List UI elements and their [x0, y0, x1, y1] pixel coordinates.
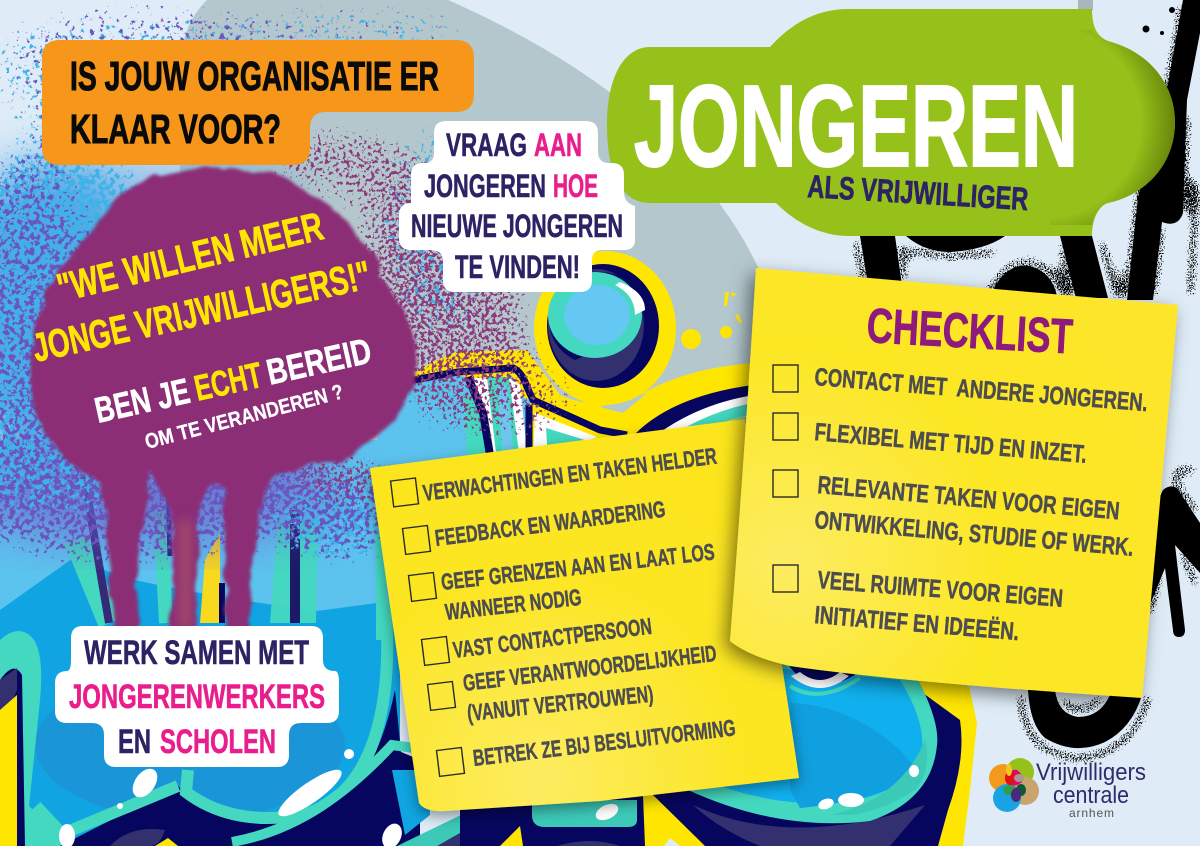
green title banner — [607, 0, 1175, 236]
graffiti ring — [534, 251, 742, 405]
list items: GEEF VERANTWOORDELIJKHEID — [462, 640, 718, 696]
right bubble — [650, 660, 977, 846]
spray speckle, black — [855, 0, 1200, 758]
centre graffiti: colour fills — [375, 375, 530, 475]
subtitle: ALS VRIJWILLIGER — [807, 168, 1029, 217]
list items: GEEF GRENZEN AAN EN LAAT LOS — [440, 538, 716, 595]
question text: ECHT — [190, 354, 266, 409]
bottom centre navy — [460, 795, 730, 846]
black graffiti letters, right — [855, 0, 1200, 758]
heading: orange bubble: KLAAR VOOR? — [70, 106, 281, 152]
checklist heading: CHECKLIST — [865, 299, 1074, 364]
graffiti artwork, centre and bottom — [0, 350, 977, 846]
left hump — [0, 631, 70, 846]
bubble text: AAN — [534, 127, 582, 163]
bubble text — [69, 634, 325, 761]
white highlights — [128, 764, 162, 802]
checkboxes — [773, 365, 798, 592]
logo icon — [989, 758, 1039, 812]
bubble text: JONGEREN — [424, 168, 546, 204]
bubble text: WERK SAMEN MET — [84, 634, 309, 672]
speckle, purple — [0, 0, 510, 770]
checklist items: VEEL RUIMTE VOOR EIGEN — [817, 566, 1064, 613]
checkboxes — [391, 478, 464, 776]
white speech bubble: vraag aan jongeren — [399, 121, 635, 292]
quote text on blob: JONGE VRIJWILLIGERS!" — [28, 253, 375, 371]
logo wordmark: Vrijwilligers — [1036, 759, 1146, 786]
list items: FEEDBACK EN WAARDERING — [433, 496, 667, 551]
blue lower field — [0, 440, 400, 846]
grey arc shape — [180, 0, 770, 560]
question text: BEN JE — [91, 370, 193, 431]
checklist items: FLEXIBEL MET TIJD EN INZET. — [813, 418, 1088, 469]
spray mass left — [0, 0, 600, 770]
heading: orange bubble — [70, 53, 439, 152]
sticky note: checklist — [730, 268, 1178, 698]
logo: Vrijwilligers centrale arnhem — [989, 758, 1146, 820]
bubble text — [411, 127, 623, 285]
list items: WANNEER NODIG — [444, 584, 583, 625]
checklist items — [813, 363, 1149, 646]
quote text on blob: "WE WILLEN MEER — [53, 204, 328, 311]
logo: Vrijwilligers centrale arnhem: arnhem — [1069, 806, 1114, 820]
speckle, blue — [0, 0, 520, 760]
bubble text: JONGERENWERKERS — [69, 678, 325, 716]
heading: orange bubble: IS JOUW ORGANISATIE ER — [70, 53, 439, 99]
white speech bubble: werk samen — [55, 626, 339, 767]
sticky note: left list — [370, 419, 799, 811]
quote text on blob — [28, 204, 375, 454]
bubble text: SCHOLEN — [160, 723, 276, 761]
list items: BETREK ZE BIJ BESLUITVORMING — [472, 714, 737, 771]
bubble text: EN — [118, 723, 151, 761]
list items: VAST CONTACTPERSOON — [451, 613, 653, 663]
list items: (VANUIT VERTROUWEN) — [466, 681, 654, 726]
bubble text: VRAAG — [446, 127, 527, 163]
centre graffiti: yellow outline — [380, 350, 770, 475]
list items — [421, 443, 737, 771]
bubble text: TE VINDEN! — [455, 249, 580, 285]
paint splashes — [681, 292, 742, 349]
centre graffiti: navy lines — [380, 368, 627, 435]
question text: BEREID — [263, 330, 375, 393]
bubble text: HOE — [553, 168, 598, 204]
list items: VERWACHTINGEN EN TAKEN HELDER — [421, 443, 719, 506]
yellow band stripes — [633, 366, 770, 432]
navy bottom — [60, 690, 410, 846]
orange speech bubble — [42, 40, 474, 165]
purple paint blob with drips — [30, 168, 418, 640]
logo: Vrijwilligers centrale arnhem: centrale — [1053, 782, 1129, 809]
checklist items: INITIATIEF EN IDEEËN. — [813, 601, 1020, 646]
question text — [91, 330, 375, 431]
bubble text: NIEUWE JONGEREN — [411, 208, 623, 244]
vertical stripes — [76, 540, 110, 623]
speckle, magenta — [240, 110, 600, 520]
quote text on blob: OM TE VERANDEREN ? — [142, 380, 346, 454]
